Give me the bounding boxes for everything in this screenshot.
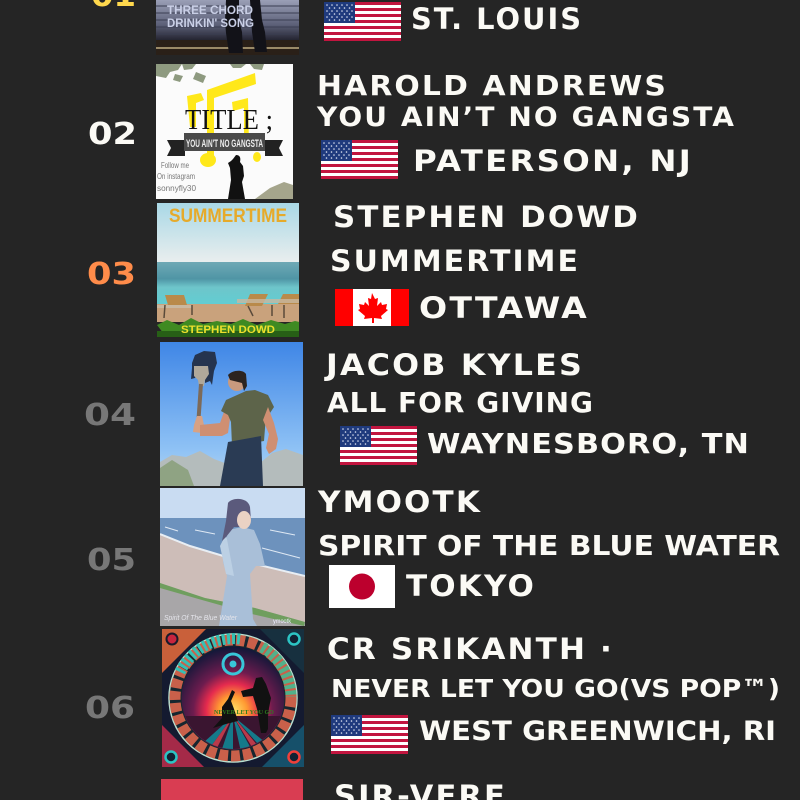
row 1: St. Louis <box>91 0 583 55</box>
album cover: You Ain't No Gangsta <box>156 64 293 199</box>
row 3: Stephen Dowd <box>87 200 640 338</box>
city: West Greenwich, RI: WEST GREENWICH, RI <box>419 716 776 747</box>
city: Waynesboro, TN: WAYNESBORO, TN <box>427 427 750 460</box>
album cover: Three Chord Drinkin' Song <box>156 0 299 55</box>
flag: Canada <box>335 289 409 326</box>
row 4: Jacob Kyles <box>84 342 750 488</box>
song: Summertime: SUMMERTIME <box>330 244 580 278</box>
artist: Jacob Kyles: JACOB KYLES <box>324 348 584 382</box>
artist: Harold Andrews: HAROLD ANDREWS <box>317 69 668 102</box>
artist: CR Srikanth: CR SRIKANTH · <box>327 632 614 666</box>
album cover: Spirit Of The Blue Water: ymootk <box>273 619 292 625</box>
flag: USA <box>331 715 408 754</box>
flag: Japan <box>329 565 395 608</box>
song: You Ain't No Gangsta: YOU AIN’T NO GANGSTA <box>316 102 736 133</box>
artist: Stephen Dowd: STEPHEN DOWD <box>333 200 640 234</box>
album cover: Three Chord Drinkin' Song: THREE CHORD <box>167 3 253 17</box>
album cover: You Ain't No Gangsta: sonnyfly30 <box>157 183 196 193</box>
rank 02: 02 <box>88 117 137 152</box>
album cover: You Ain't No Gangsta: YOU AIN'T NO GANGSTA <box>186 138 263 150</box>
flag: USA <box>321 140 398 179</box>
album cover: You Ain't No Gangsta: TITLE ; <box>185 104 273 136</box>
album cover: Spirit Of The Blue Water: Spirit Of The Blue Water <box>164 613 237 622</box>
album cover: Summertime: STEPHEN DOWD <box>181 324 275 336</box>
album cover: Summertime: SUMMERTIME <box>169 206 287 227</box>
flag: USA <box>324 2 401 41</box>
album cover: Spirit Of The Blue Water <box>160 488 305 626</box>
city: Ottawa: OTTAWA <box>419 291 589 325</box>
row 7: Sir-Vere <box>161 779 507 800</box>
flag: USA <box>340 426 417 465</box>
album cover: You Ain't No Gangsta: On instagram <box>157 171 195 181</box>
song: Never Let You Go (VS Pop): NEVER LET YOU GO(VS POP™) <box>331 674 780 703</box>
row 5: Ymootk <box>87 485 780 626</box>
city: St. Louis: ST. LOUIS <box>411 2 583 36</box>
album cover: Never Let You Go: NEVER LET YOU GO <box>214 710 274 716</box>
row 2: Harold Andrews <box>88 64 736 199</box>
rank 03: 03 <box>87 257 136 292</box>
song: All For Giving: ALL FOR GIVING <box>327 386 594 419</box>
album cover: Never Let You Go <box>162 629 304 767</box>
album cover: Summertime <box>157 203 309 338</box>
rank 04: 04 <box>84 398 136 433</box>
album cover: You Ain't No Gangsta: Follow me <box>161 160 189 170</box>
city: Paterson, NJ: PATERSON, NJ <box>413 144 693 178</box>
artist: Ymootk: YMOOTK <box>317 485 482 519</box>
rank 05: 05 <box>87 543 136 578</box>
album cover: All For Giving <box>160 342 303 488</box>
song: Spirit of the Blue Water: SPIRIT OF THE BLUE WATER <box>318 529 780 562</box>
album cover: Three Chord Drinkin' Song: DRINKIN' SONG <box>167 16 254 30</box>
rank 06: 06 <box>85 691 135 726</box>
row 6: CR Srikanth <box>85 629 780 767</box>
album cover: clipped red cover <box>161 779 303 800</box>
city: Tokyo: TOKYO <box>406 569 536 603</box>
